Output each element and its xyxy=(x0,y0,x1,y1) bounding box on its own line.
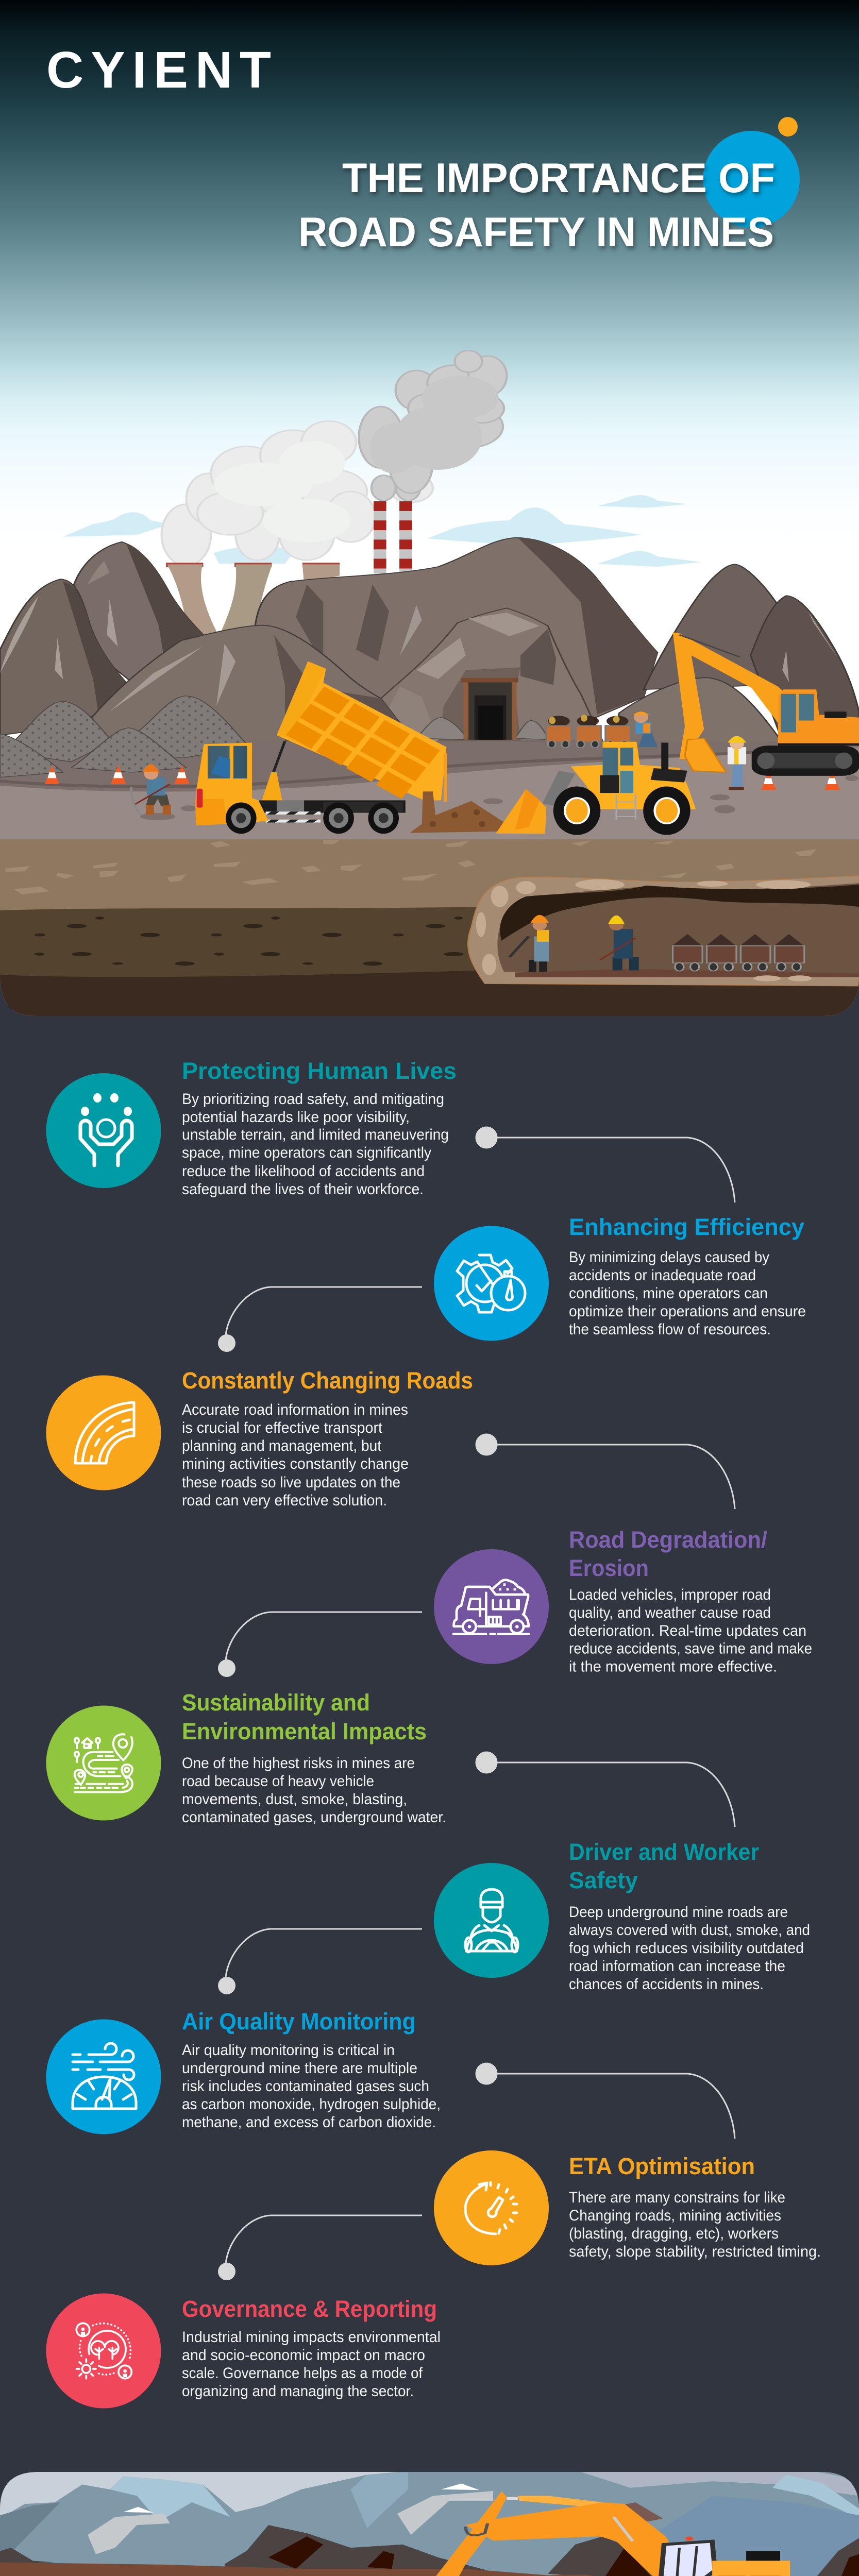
item: driver and worker safety xyxy=(434,1839,810,1993)
description: is crucial for effective transport xyxy=(182,1419,383,1436)
mine landscape xyxy=(0,538,859,1019)
dirt pile xyxy=(410,791,507,833)
description: optimize their operations and ensure xyxy=(569,1303,806,1320)
item: road degradation xyxy=(434,1527,812,1675)
description: conditions, mine operators can xyxy=(569,1285,768,1302)
mine carts on surface xyxy=(546,715,631,748)
item: constantly changing roads xyxy=(46,1367,473,1509)
worker pushing cart xyxy=(633,711,658,747)
description: Changing roads, mining activities xyxy=(569,2207,781,2224)
description xyxy=(569,1249,806,1338)
heading: Enhancing Efficiency xyxy=(569,1214,804,1240)
description: Industrial mining impacts environmental xyxy=(182,2329,441,2346)
description: it the movement more effective. xyxy=(569,1658,777,1675)
top mining scene illustration xyxy=(0,0,859,1019)
description: Air quality monitoring is critical in xyxy=(182,2042,395,2059)
mine entrance xyxy=(461,677,518,740)
icon: governance cycle xyxy=(46,2294,161,2408)
cave hill xyxy=(378,608,603,741)
brown hills xyxy=(0,2562,660,2576)
description: Loaded vehicles, improper road xyxy=(569,1586,771,1603)
underground strata xyxy=(0,839,859,1019)
heading xyxy=(182,1689,427,1744)
miner with pick xyxy=(131,764,175,820)
description: the seamless flow of resources. xyxy=(569,1321,771,1338)
heading: Air Quality Monitoring xyxy=(182,2008,416,2035)
heading: Safety xyxy=(569,1867,638,1893)
title: ROAD SAFETY IN MINES xyxy=(298,209,774,256)
description: underground mine there are multiple xyxy=(182,2060,417,2077)
description: road can very effective solution. xyxy=(182,1492,387,1509)
description: scale. Governance helps as a mode of xyxy=(182,2365,423,2382)
heading xyxy=(569,1527,767,1581)
excavator xyxy=(397,2491,790,2576)
description: space, mine operators can significantly xyxy=(182,1144,431,1161)
heading: Protecting Human Lives xyxy=(182,1058,457,1084)
strata stones xyxy=(6,840,816,965)
description: movements, dust, smoke, blasting, xyxy=(182,1791,407,1808)
description: contaminated gases, underground water. xyxy=(182,1809,446,1826)
item: sustainability and environmental impacts xyxy=(46,1689,446,1826)
heading: Governance & Reporting xyxy=(182,2296,437,2322)
front centre mountain xyxy=(90,625,783,744)
description xyxy=(182,1091,449,1198)
item: eta optimisation xyxy=(434,2150,821,2265)
item: enhancing efficiency xyxy=(434,1214,806,1341)
icon: speedometer xyxy=(434,2150,549,2265)
icon: loaded dump truck xyxy=(434,1549,549,1664)
description: methane, and excess of carbon dioxide. xyxy=(182,2114,436,2131)
gravel piles xyxy=(0,696,548,777)
description: reduce the likelihood of accidents and xyxy=(182,1163,425,1180)
cooling tower caps xyxy=(166,563,340,567)
chimneys xyxy=(374,501,412,573)
connector 1 xyxy=(475,1126,735,1202)
smoke clouds and chimneys xyxy=(63,350,701,573)
description: always covered with dust, smoke, and xyxy=(569,1922,810,1939)
description: chances of accidents in mines. xyxy=(569,1976,764,1993)
connector 5 xyxy=(475,1752,735,1827)
description: By prioritizing road safety, and mitigating xyxy=(182,1091,444,1108)
description: road information can increase the xyxy=(569,1958,785,1975)
item: air quality monitoring xyxy=(46,2008,441,2134)
icon: wind and gauge xyxy=(46,2020,161,2134)
description: unstable terrain, and limited maneuvering xyxy=(182,1126,449,1143)
description: accidents or inadequate road xyxy=(569,1267,756,1284)
wheel loader xyxy=(496,742,696,835)
central big mountain xyxy=(255,538,658,738)
description: as carbon monoxide, hydrogen sulphide, xyxy=(182,2096,441,2113)
sky gradient xyxy=(0,0,859,1016)
description: (blasting, dragging, etc), workers xyxy=(569,2225,779,2242)
description: organizing and managing the sector. xyxy=(182,2383,414,2400)
heading xyxy=(569,1839,759,1893)
heading: Environmental Impacts xyxy=(182,1718,427,1744)
item: protecting human lives xyxy=(46,1058,457,1198)
description xyxy=(569,1904,810,1993)
heading: Driver and Worker xyxy=(569,1839,759,1865)
mountains xyxy=(0,2472,859,2576)
road cones xyxy=(45,765,840,790)
title xyxy=(298,155,775,256)
company logo: CYIENT xyxy=(46,41,271,99)
sky xyxy=(0,2472,859,2575)
description: quality, and weather cause road xyxy=(569,1604,771,1621)
cooling towers xyxy=(167,564,340,638)
description: mining activities constantly change xyxy=(182,1455,409,1472)
description: Deep underground mine roads are xyxy=(569,1904,788,1921)
page background dark panel xyxy=(0,927,859,2576)
tunnel xyxy=(468,876,859,986)
description xyxy=(182,2042,441,2131)
description xyxy=(569,2189,821,2260)
heading: ETA Optimisation xyxy=(569,2153,755,2179)
back mountains left xyxy=(0,542,204,735)
title: THE IMPORTANCE OF xyxy=(342,155,775,201)
description: these roads so live updates on the xyxy=(182,1474,400,1491)
description xyxy=(182,2329,441,2400)
heading: Road Degradation/ xyxy=(569,1527,767,1553)
item: governance and reporting xyxy=(46,2294,441,2408)
underground miners xyxy=(510,915,639,972)
description: risk includes contaminated gases such xyxy=(182,2078,429,2095)
description: road because of heavy vehicle xyxy=(182,1773,374,1790)
description: planning and management, but xyxy=(182,1437,382,1454)
description: potential hazards like poor visibility, xyxy=(182,1109,410,1126)
description xyxy=(569,1586,812,1675)
description: There are many constrains for like xyxy=(569,2189,785,2206)
dark rocks xyxy=(0,2502,859,2576)
icon: hands holding person xyxy=(46,1073,161,1188)
title accent circles xyxy=(703,117,800,228)
description: deterioration. Real-time updates can xyxy=(569,1622,806,1639)
right mountains xyxy=(644,564,859,744)
description: safety, slope stability, restricted timing. xyxy=(569,2243,821,2260)
description: and socio-economic impact on macro xyxy=(182,2347,425,2364)
connector 6 xyxy=(218,1929,422,1994)
excavator xyxy=(673,632,859,776)
connector 4 xyxy=(218,1612,422,1677)
connector 2 xyxy=(218,1287,422,1352)
description xyxy=(182,1401,409,1509)
description: By minimizing delays caused by xyxy=(569,1249,769,1266)
description: safeguard the lives of their workforce. xyxy=(182,1181,424,1198)
icon: driver at wheel xyxy=(434,1863,549,1978)
description: One of the highest risks in mines are xyxy=(182,1755,415,1772)
road spots xyxy=(181,775,858,814)
connector 7 xyxy=(475,2063,735,2139)
engineer xyxy=(728,736,746,790)
description: fog which reduces visibility outdated xyxy=(569,1940,804,1957)
underground carts xyxy=(673,934,804,971)
icon: curved road xyxy=(46,1376,161,1490)
description: reduce accidents, save time and make xyxy=(569,1640,812,1657)
ground surface xyxy=(0,741,859,840)
bottom quarry scene illustration xyxy=(0,2472,859,2576)
icon: gear and stopwatch xyxy=(434,1226,549,1341)
description: Accurate road information in mines xyxy=(182,1401,408,1418)
icon: road map with pins xyxy=(46,1705,161,1821)
heading: Constantly Changing Roads xyxy=(182,1367,473,1394)
heading: Sustainability and xyxy=(182,1689,370,1716)
dump truck xyxy=(195,662,447,834)
description xyxy=(182,1755,446,1826)
connector 3 xyxy=(475,1433,735,1509)
connector 8 xyxy=(218,2215,422,2280)
heading: Erosion xyxy=(569,1555,649,1581)
